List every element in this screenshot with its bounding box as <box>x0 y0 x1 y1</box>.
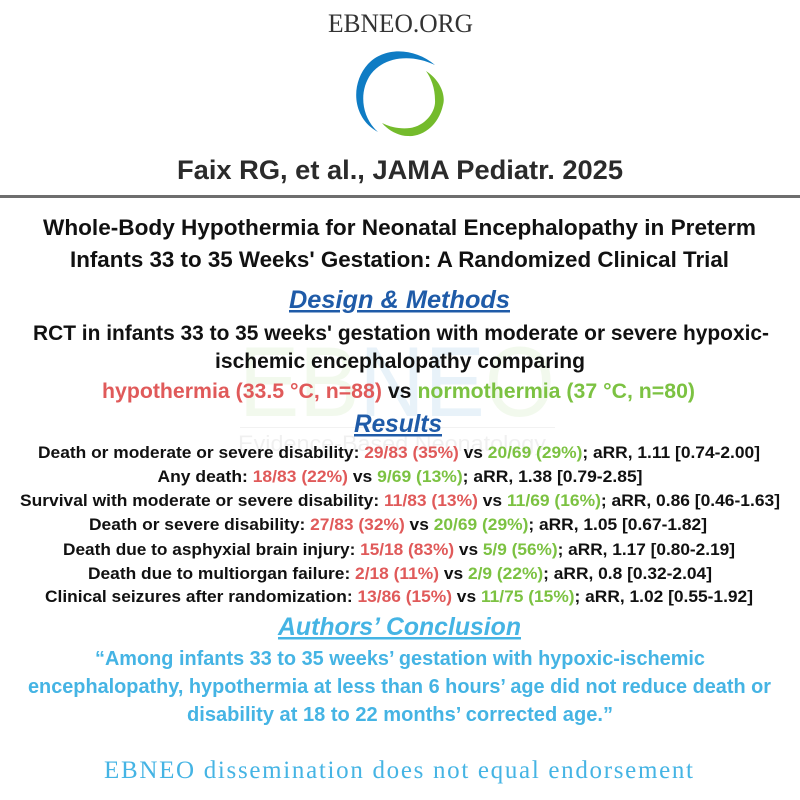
footer disclaimer: EBNEO dissemination does not equal endorsement <box>104 757 693 784</box>
results list: Death or moderate or severe disability: 29/83 (35%) vs 20/69 (29%) ; aRR, 1.11 [0.74-2.00] <box>38 444 760 462</box>
heading: design and methods: Design & Methods <box>289 286 510 314</box>
heading: results: Results <box>354 410 442 438</box>
results list: Death due to multiorgan failure: 2/18 (11%) vs 2/9 (22%); aRR, 0.8 [0.32-2.04] <box>88 565 712 583</box>
conclusion quote: “Among infants 33 to 35 weeks’ gestation with hypoxic-ischemic <box>95 648 705 670</box>
divider <box>0 195 800 198</box>
site name: EBNEO.ORG <box>328 9 473 38</box>
design description: ischemic encephalopathy comparing <box>215 350 585 373</box>
design description: RCT in infants 33 to 35 weeks' gestation with moderate or severe hypoxic- <box>33 322 769 345</box>
study title <box>43 215 756 272</box>
results list: Death or severe disability: 27/83 (32%) vs 20/69 (29%) ; aRR, 1.05 [0.67-1.82] <box>89 516 707 534</box>
heading: authors' conclusion: Authors’ Conclusion <box>277 613 521 641</box>
conclusion quote: disability at 18 to 22 months’ corrected age.” <box>187 704 613 726</box>
results list: Clinical seizures after randomization: 13/86 (15%) vs 11/75 (15%) ; aRR, 1.02 [0.55-1.92] <box>45 588 753 606</box>
citation: Faix RG, et al., JAMA Pediatr. 2025 <box>177 155 623 185</box>
results list: Survival with moderate or severe disability: 11/83 (13%) vs 11/69 (16%) ; aRR, 0.86 [0.46-1.63] <box>20 492 780 510</box>
watermark: faint EBNEO logo: EBNEO <box>239 326 555 437</box>
conclusion quote <box>28 648 771 726</box>
watermark: faint EBNEO logo: Evidence-Based Neonatology <box>238 431 546 456</box>
study title: Infants 33 to 35 Weeks' Gestation: A Randomized Clinical Trial <box>70 247 729 272</box>
study title: Whole-Body Hypothermia for Neonatal Encephalopathy in Preterm <box>43 215 756 240</box>
conclusion quote: encephalopathy, hypothermia at less than 6 hours’ age did not reduce death or <box>28 676 771 698</box>
results list: Any death: 18/83 (22%) vs 9/69 (13%) ; aRR, 1.38 [0.79-2.85] <box>158 468 642 486</box>
icon: EBNEO ring logo <box>356 51 444 136</box>
study arms: hypothermia (33.5 °C, n=88) vs normothermia (37 °C, n=80) <box>102 380 695 403</box>
design description <box>33 322 769 373</box>
results list <box>20 444 780 606</box>
results list: Death due to asphyxial brain injury: 15/18 (83%) vs 5/9 (56%); aRR, 1.17 [0.80-2.19] <box>63 541 735 559</box>
